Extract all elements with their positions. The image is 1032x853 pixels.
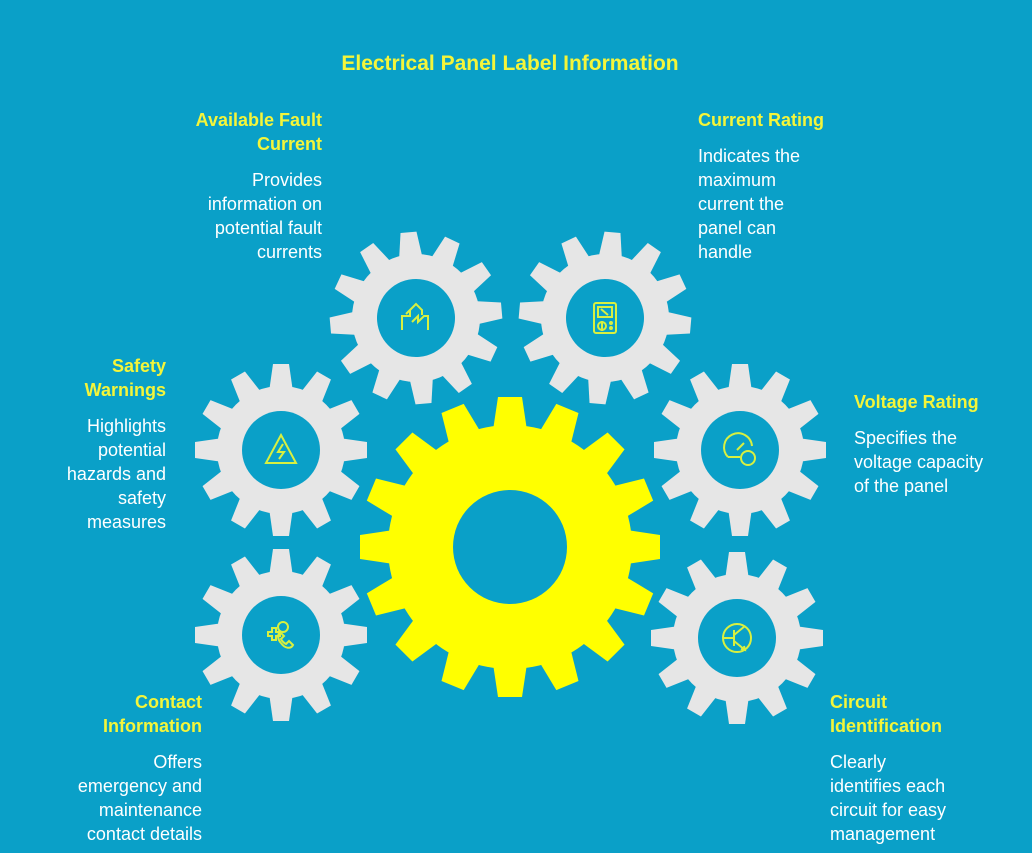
gear: circuit identification bbox=[651, 552, 823, 724]
text: contact information: contact details bbox=[87, 824, 202, 844]
text: current rating: current the bbox=[698, 194, 784, 214]
text: current rating: panel can bbox=[698, 218, 776, 238]
text: current rating: handle bbox=[698, 242, 752, 262]
text: contact information: emergency and bbox=[78, 776, 202, 796]
text: current rating: Indicates the bbox=[698, 146, 800, 166]
text: contact information: Offers bbox=[153, 752, 202, 772]
icon: house with lightning bbox=[402, 304, 428, 330]
text: voltage rating: of the panel bbox=[854, 476, 948, 496]
text: circuit identification: Clearly bbox=[830, 752, 886, 772]
text: available fault current: currents bbox=[257, 242, 322, 262]
text: safety warnings: Warnings bbox=[85, 380, 166, 400]
text: current rating: maximum bbox=[698, 170, 776, 190]
text: available fault current: Available Fault bbox=[196, 110, 322, 130]
text: available fault current: potential fault bbox=[215, 218, 322, 238]
text: circuit identification: circuit for easy bbox=[830, 800, 946, 820]
text: safety warnings: potential bbox=[98, 440, 166, 460]
text: contact information: maintenance bbox=[99, 800, 202, 820]
text: circuit identification: management bbox=[830, 824, 935, 844]
icon: meter bbox=[594, 303, 616, 333]
text: voltage rating: Specifies the bbox=[854, 428, 957, 448]
text: circuit identification: identifies each bbox=[830, 776, 945, 796]
text: current rating: Current Rating bbox=[698, 110, 824, 130]
text: circuit identification bbox=[830, 692, 946, 844]
text: safety warnings: Safety bbox=[112, 356, 166, 376]
text: circuit identification: Circuit bbox=[830, 692, 887, 712]
central gear bbox=[360, 397, 660, 697]
text: voltage rating: voltage capacity bbox=[854, 452, 983, 472]
text: voltage rating: Voltage Rating bbox=[854, 392, 979, 412]
text: available fault current: Provides bbox=[252, 170, 322, 190]
text: contact information: Information bbox=[103, 716, 202, 736]
text: available fault current: information on bbox=[208, 194, 322, 214]
text: contact information bbox=[78, 692, 202, 844]
text: safety warnings bbox=[67, 356, 166, 532]
gear: voltage rating bbox=[654, 364, 826, 536]
text: safety warnings: Highlights bbox=[87, 416, 166, 436]
text: available fault current bbox=[196, 110, 322, 262]
icon: medical phone bbox=[268, 622, 293, 648]
text: voltage rating bbox=[854, 392, 984, 496]
text: safety warnings: safety bbox=[118, 488, 166, 508]
gear: available fault current bbox=[323, 225, 509, 411]
text: current rating bbox=[698, 110, 824, 262]
text: circuit identification: Identification bbox=[830, 716, 942, 736]
text: safety warnings: measures bbox=[87, 512, 166, 532]
text: contact information: Contact bbox=[135, 692, 202, 712]
gear: current rating bbox=[512, 225, 698, 411]
text: available fault current: Current bbox=[257, 134, 322, 154]
icon: warning triangle bbox=[266, 435, 296, 463]
gear: safety warnings bbox=[195, 364, 367, 536]
icon: transistor bbox=[723, 624, 751, 652]
icon: gauge bbox=[724, 433, 755, 465]
text: safety warnings: hazards and bbox=[67, 464, 166, 484]
gear: contact information bbox=[195, 549, 367, 721]
title: Electrical Panel Label Information bbox=[341, 52, 679, 75]
